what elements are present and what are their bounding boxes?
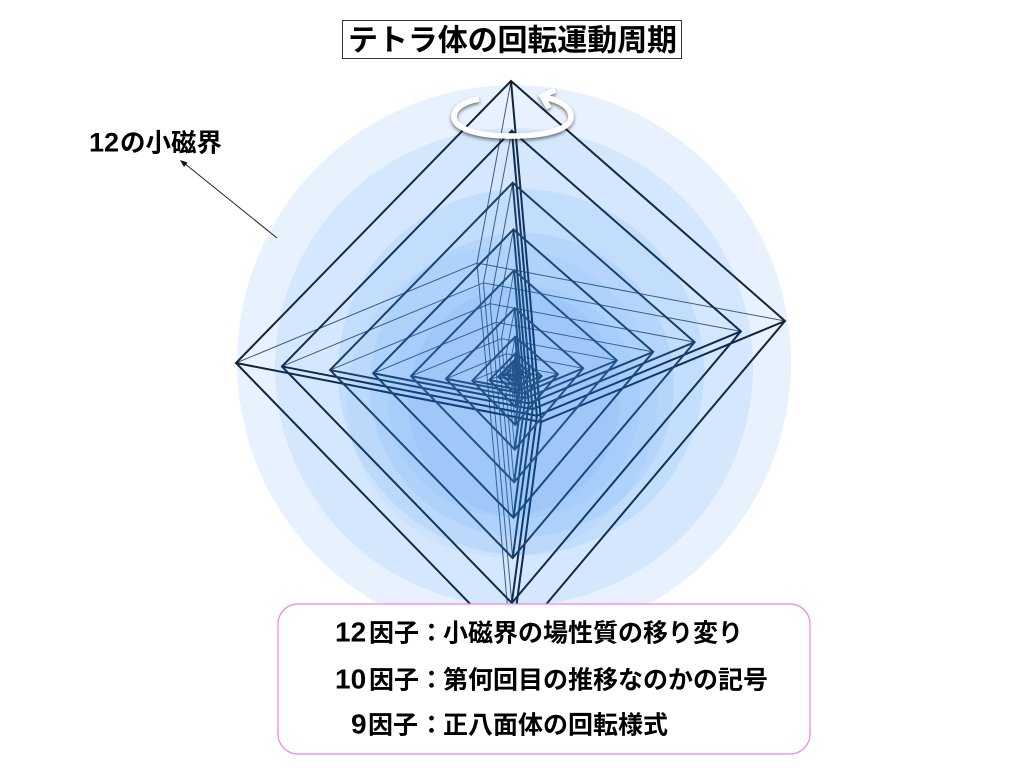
text: 9 factors: ：: [419, 706, 444, 742]
text: 9 factors: 9: [351, 708, 367, 740]
text: 9 factors: 因子: [368, 706, 418, 742]
diagram: nested octahedra with magnetic field circles: [236, 81, 791, 646]
label: 12 small magnetic fields: の小磁界: [120, 122, 222, 160]
label: 12 small magnetic fields: 12: [89, 128, 119, 158]
text: 12 factors: 小磁界の場性質の移り変り: [443, 614, 743, 650]
octahedron wireframes, scaled around the center: [236, 81, 785, 646]
icon: rotation arrow ring: [454, 90, 571, 136]
text: 10 factors: 因子: [369, 660, 419, 696]
text: 10 factors: ：: [419, 660, 444, 696]
text: 12 factors: ：: [419, 614, 444, 650]
text: 12 factors: 因子: [369, 614, 419, 650]
text: 10 factors: 10: [335, 664, 366, 694]
arrow: from circles to label: [180, 160, 277, 238]
text: 9 factors: 正八面体の回転様式: [443, 706, 668, 742]
title: テトラ体の回転運動周期: [348, 16, 677, 60]
concentric field circles: [237, 85, 791, 639]
panel: factor legend: [278, 604, 810, 754]
text: 12 factors: 12: [335, 616, 366, 648]
text: 10 factors: 第何回目の推移なのかの記号: [443, 660, 768, 696]
